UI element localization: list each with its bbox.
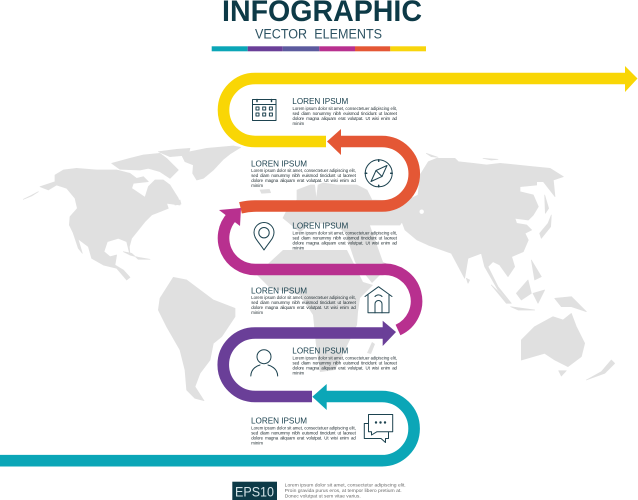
footer text: Proin gravida purus eros, at tempor libero pretium at. — [285, 488, 402, 494]
text block 5: sed diam nonummy nibh euismod tincidunt ut laoreet — [292, 361, 398, 366]
eurasia and oceania — [283, 153, 615, 380]
text block 4 — [251, 285, 357, 315]
text block 2: dolore magna aliquam erat volutpat. Ut wisi enim ad — [251, 178, 356, 183]
footer text: Donec volutpat ut sem vitae varius. — [285, 494, 361, 500]
icon: location pin — [254, 222, 274, 250]
colour bar — [212, 46, 426, 51]
text block 5: minim — [292, 371, 305, 376]
text block 2 — [251, 158, 357, 188]
text block 2: Lorem ipsum dolor sit amet, consectetuer adipiscing elit, — [251, 168, 356, 173]
text block 1: Lorem ipsum dolor sit amet, consectetuer adipiscing elit, — [292, 106, 397, 111]
text block 3: sed diam nonummy nibh euismod tincidunt ut laoreet — [292, 236, 398, 240]
text block 3: dolore magna aliquam erat volutpat. Ut wisi enim ad — [292, 240, 398, 246]
EPS10 badge: EPS10 — [235, 484, 274, 500]
text block 1: LOREN IPSUM — [292, 96, 348, 106]
text block 4: sed diam nonummy nibh euismod tincidunt ut laoreet — [251, 300, 357, 305]
red arrow — [240, 129, 414, 208]
north america — [23, 148, 190, 280]
text block 2: LOREN IPSUM — [251, 158, 307, 168]
text block 2: minim — [251, 183, 263, 188]
text block 6: dolore magna aliquam erat volutpat. Ut wisi enim ad — [251, 435, 356, 440]
icon: person — [251, 350, 278, 376]
icon: calendar — [252, 100, 276, 120]
purple arrow — [223, 321, 396, 396]
text block 6: LOREN IPSUM — [251, 416, 307, 426]
text block 5 — [292, 346, 398, 376]
text block 1: minim — [292, 121, 305, 126]
text block 4: Lorem ipsum dolor sit amet, consectetuer adipiscing elit, — [251, 295, 356, 300]
icon: chat bubbles — [364, 414, 393, 442]
text block 5: dolore magna aliquam erat volutpat. Ut wisi enim ad — [292, 366, 398, 371]
magenta arrow — [219, 208, 417, 330]
subtitle: VECTOR ELEMENTS — [255, 27, 382, 42]
text block 1: dolore magna aliquam erat volutpat. Ut wisi enim ad — [292, 116, 398, 121]
footer text: Lorem ipsum dolor sit amet, consectetur adipiscing elit. — [285, 482, 406, 488]
arabia — [345, 220, 390, 283]
text block 6 — [251, 416, 357, 445]
text block 4: dolore magna aliquam erat volutpat. Ut wisi enim ad — [251, 305, 356, 310]
yellow arrow — [224, 66, 638, 142]
text block 4: LOREN IPSUM — [251, 285, 307, 295]
text block 5: Lorem ipsum dolor sit amet, consectetuer adipiscing elit, — [292, 356, 397, 361]
text block 6: minim — [251, 440, 263, 445]
footer text — [285, 482, 406, 500]
text block 3 — [292, 221, 398, 250]
madagascar — [367, 342, 375, 354]
lake — [420, 210, 424, 214]
text block 1 — [292, 96, 398, 126]
world map — [23, 146, 615, 401]
africa — [257, 250, 373, 372]
icon: compass — [365, 160, 392, 187]
text block 3: Lorem ipsum dolor sit amet, consectetuer adipiscing elit, — [292, 230, 397, 236]
text block 4: minim — [251, 310, 263, 315]
text block 2: sed diam nonummy nibh euismod tincidunt ut laoreet — [251, 173, 357, 178]
text block 3: LOREN IPSUM — [292, 221, 348, 231]
text block 6: Lorem ipsum dolor sit amet, consectetuer adipiscing elit, — [251, 425, 356, 430]
icon: house — [365, 287, 392, 313]
greenland and south america — [158, 146, 271, 401]
text block 6: sed diam nonummy nibh euismod tincidunt ut laoreet — [251, 430, 357, 435]
text block 3: minim — [292, 246, 305, 250]
text block 1: sed diam nonummy nibh euismod tincidunt ut laoreet — [292, 111, 398, 116]
teal arrow — [0, 384, 414, 461]
text block 5: LOREN IPSUM — [292, 346, 348, 356]
